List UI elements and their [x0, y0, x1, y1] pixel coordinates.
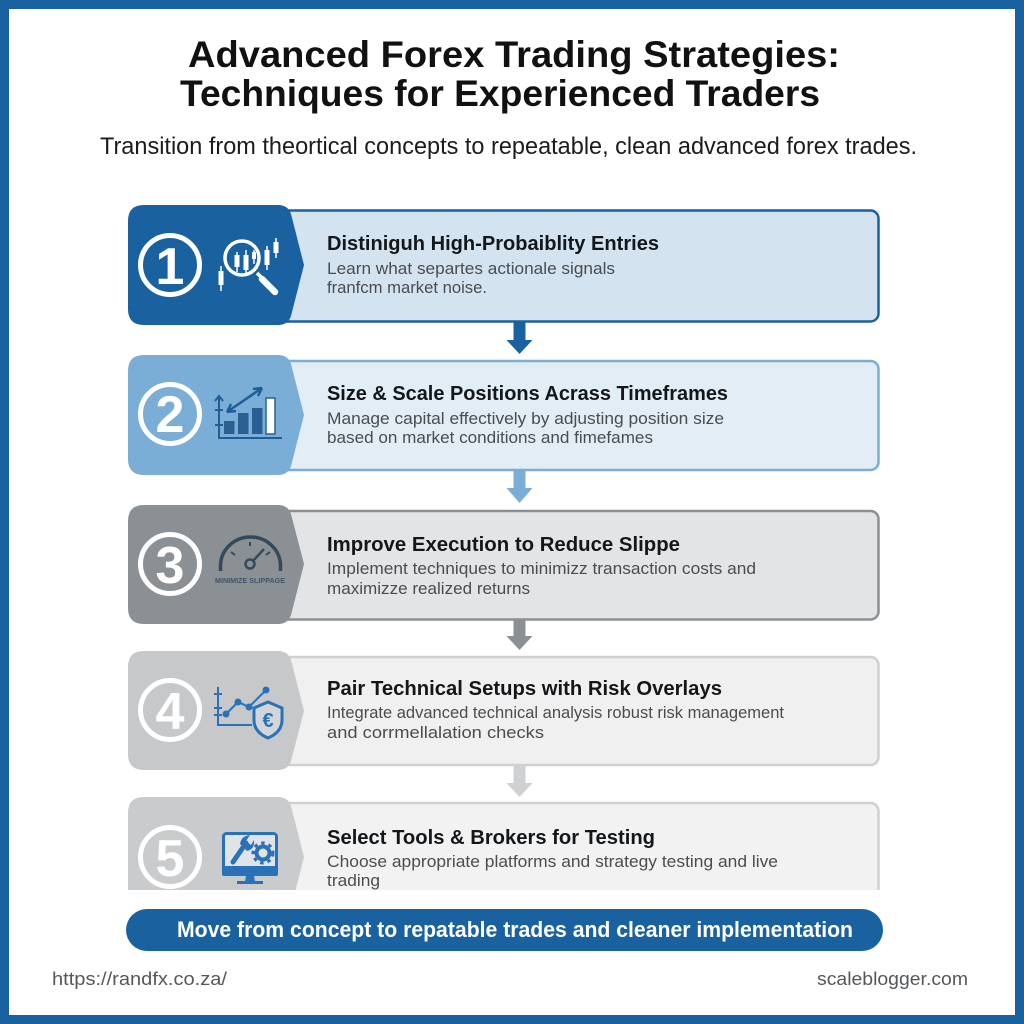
- step 2 description: based on market conditions and fimefames: [327, 428, 653, 447]
- step 2 tab: [128, 355, 304, 475]
- panel: step 5: [128, 797, 880, 890]
- step 3 tab: [128, 505, 304, 624]
- step 2 heading: Size & Scale Positions Acrass Timeframes: [327, 382, 728, 405]
- step 2 number: 2: [156, 386, 184, 444]
- icon: slippage gauge: [215, 537, 285, 585]
- step 5 number: 5: [156, 830, 184, 888]
- step 4 description: Integrate advanced technical analysis robust risk management: [327, 703, 784, 722]
- panel: step 1: [128, 205, 878, 325]
- step 5 tab: [128, 797, 304, 890]
- step 2 number: [140, 384, 200, 444]
- step 4 heading: Pair Technical Setups with Risk Overlays: [327, 677, 722, 700]
- step 2 description: Manage capital effectively by adjusting position size: [327, 409, 724, 428]
- step 1 tab: [128, 205, 304, 325]
- icon: magnifier over candlesticks: [218, 238, 278, 292]
- step 5 description: [327, 852, 778, 890]
- step 1 description: [327, 259, 615, 297]
- step 5 description: Choose appropriate platforms and strategy testing and live: [327, 852, 778, 871]
- step 4 description: and corrmellalation checks: [327, 723, 544, 742]
- step 4 card: [270, 657, 878, 765]
- step 5 card: [288, 802, 880, 890]
- step 3 number: 3: [156, 537, 184, 595]
- icon: line chart with euro shield: [214, 686, 282, 738]
- panel: step 2: [128, 355, 878, 475]
- arrow: step 2 to 3: [506, 470, 532, 503]
- step 1 card: [270, 210, 878, 322]
- step 3 description: [327, 559, 756, 598]
- footer right url: scaleblogger.com: [817, 968, 968, 989]
- step 1 description: franfcm market noise.: [327, 278, 487, 297]
- step 1 description: Learn what separtes actionale signals: [327, 259, 615, 278]
- callout banner: Move from concept to repatable trades and cleaner implementation: [177, 917, 853, 942]
- step 5 heading: Select Tools & Brokers for Testing: [327, 826, 655, 849]
- step 5 description: trading: [327, 871, 380, 890]
- step 3 number: [140, 534, 200, 595]
- footer left url: https://randfx.co.za/: [52, 968, 228, 989]
- step 3 description: maximizze realized returns: [327, 579, 530, 598]
- callout banner: [126, 909, 883, 951]
- title: Techniques for Experienced Traders: [180, 72, 820, 114]
- step 2 description: [327, 409, 724, 447]
- icon: growing bar chart: [215, 388, 282, 438]
- step 5 number: [140, 828, 200, 888]
- title: Advanced Forex Trading Strategies:: [188, 33, 840, 75]
- step 3 card: [270, 511, 878, 620]
- arrow: step 4 to 5: [506, 765, 532, 797]
- icon: line chart with euro shield: €: [262, 710, 274, 732]
- subtitle: Transition from theortical concepts to repeatable, clean advanced forex trades.: [100, 133, 917, 160]
- step 4 number: 4: [156, 683, 185, 741]
- title: [180, 33, 840, 114]
- icon: monitor with wrench and gear: [222, 834, 278, 884]
- arrow: step 1 to 2: [506, 322, 532, 354]
- step 3 description: Implement techniques to minimizz transaction costs and: [327, 559, 756, 578]
- step 1 heading: Distiniguh High-Probaiblity Entries: [327, 232, 659, 255]
- step 4 number: [140, 680, 200, 741]
- panel: step 4: [128, 651, 878, 770]
- icon: slippage gauge: MINIMIZE SLIPPAGE: [215, 578, 285, 585]
- step 1 number: 1: [156, 238, 184, 296]
- step 1 number: [140, 236, 200, 296]
- step 3 heading: Improve Execution to Reduce Slippe: [327, 533, 680, 556]
- arrow: step 3 to 4: [506, 620, 532, 650]
- step 4 description: [327, 703, 784, 742]
- step 2 card: [270, 361, 878, 470]
- panel: step 3: [128, 505, 878, 624]
- step 4 tab: [128, 651, 304, 770]
